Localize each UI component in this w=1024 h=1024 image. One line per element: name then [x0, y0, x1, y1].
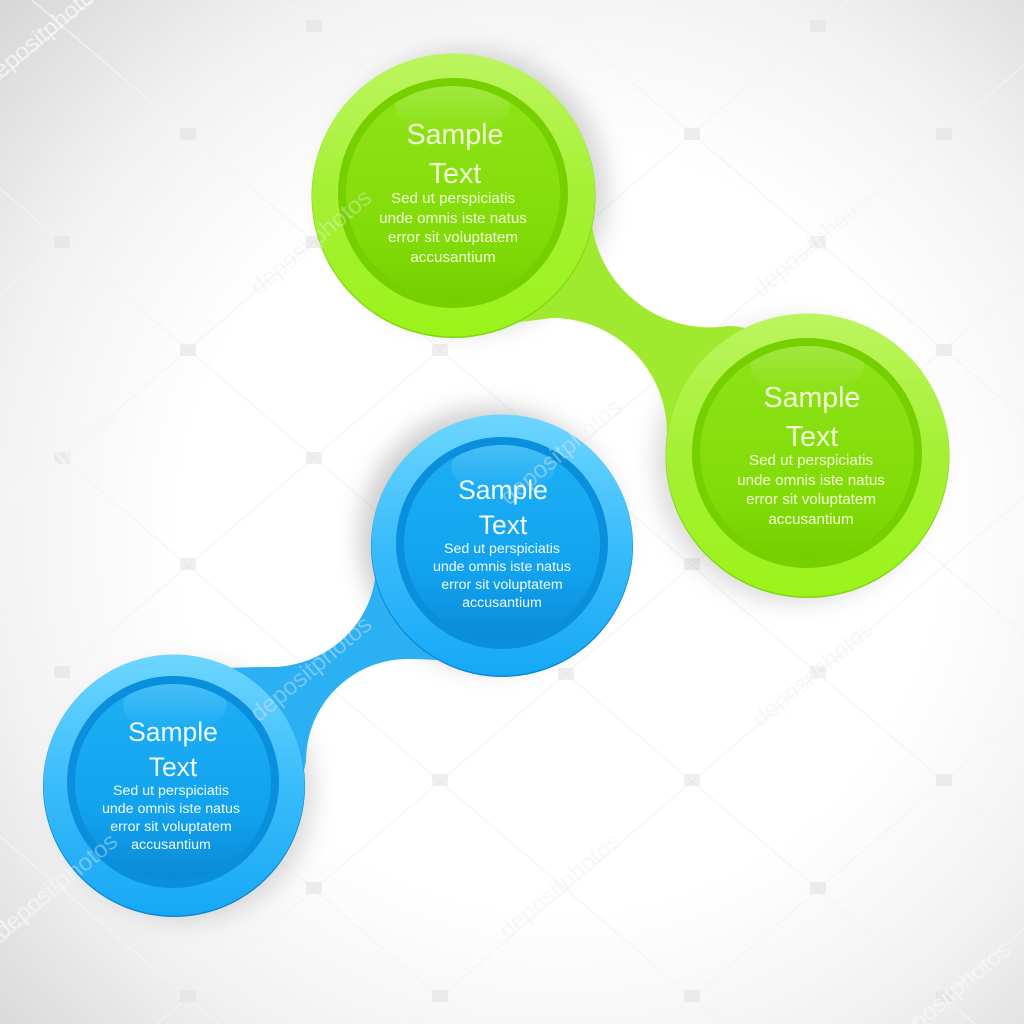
node: green bottom [666, 314, 950, 598]
green bottom text: unde omnis iste natus [737, 472, 885, 489]
green top text: Text [429, 158, 481, 190]
watermark text: depositphotos [747, 616, 879, 733]
watermark text over nodes: depositphotos [245, 184, 377, 301]
blue upper text: Sed ut perspiciatis [444, 541, 560, 557]
node: blue lower [43, 654, 305, 917]
watermark text: depositphotos [494, 828, 626, 945]
green bottom text: accusantium [768, 511, 854, 528]
watermark text over nodes: depositphotos [245, 611, 377, 728]
blue lower text: error sit voluptatem [110, 819, 232, 835]
blue lower text: unde omnis iste natus [102, 801, 240, 817]
green top text [379, 119, 527, 266]
green top text: accusantium [410, 249, 496, 266]
green connector with shadow [327, 51, 935, 602]
blue upper text: error sit voluptatem [441, 577, 563, 593]
blue upper text: Text [479, 510, 528, 540]
watermark text: depositphotos [747, 186, 879, 303]
green bottom text: Sed ut perspiciatis [749, 452, 873, 469]
green bottom text: Text [786, 421, 838, 453]
green bottom text [737, 382, 885, 528]
blue lower disc [43, 654, 305, 917]
green top text: Sample [407, 119, 503, 151]
node: blue upper [371, 414, 633, 677]
blue upper text: accusantium [462, 595, 542, 611]
blue upper disc [371, 414, 633, 677]
watermark text over nodes [0, 184, 627, 945]
blue lower text: accusantium [131, 837, 211, 853]
green top disc [312, 54, 596, 338]
green bottom disc [666, 314, 950, 598]
green top text: Sed ut perspiciatis [391, 190, 515, 207]
node: green top [312, 54, 596, 338]
green bottom text: error sit voluptatem [746, 491, 876, 508]
blue connector with shadow [58, 408, 620, 920]
green bottom text: Sample [764, 382, 860, 414]
blue lower text: Sample [128, 717, 218, 747]
blue upper text [433, 475, 571, 611]
blue lower text: Sed ut perspiciatis [113, 783, 229, 799]
blue lower text [102, 717, 240, 853]
green top text: error sit voluptatem [388, 229, 518, 246]
green top text: unde omnis iste natus [379, 210, 527, 227]
blue upper text: unde omnis iste natus [433, 559, 571, 575]
blue lower text: Text [149, 752, 198, 782]
watermark text over nodes: depositphotos [495, 394, 627, 511]
blue upper text: Sample [458, 475, 548, 505]
